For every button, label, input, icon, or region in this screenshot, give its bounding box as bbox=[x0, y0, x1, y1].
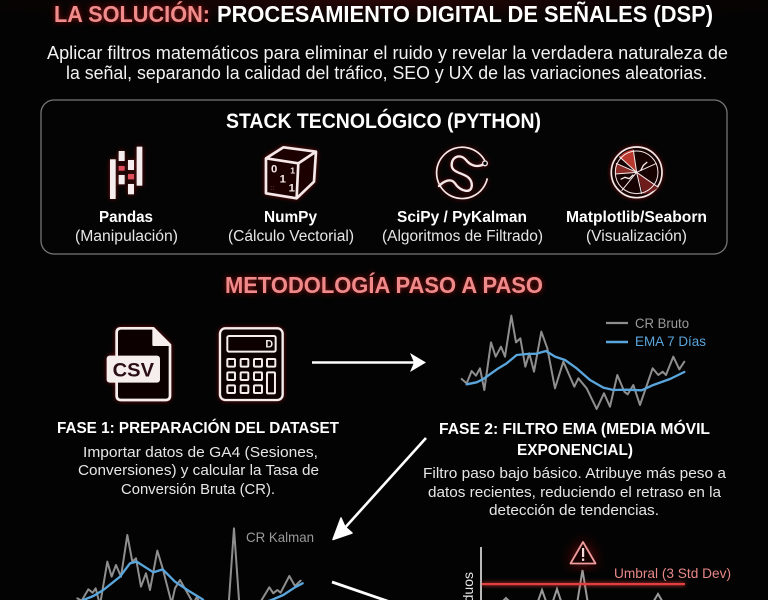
arrow: fase 1 to fase 2 bbox=[312, 353, 426, 372]
icon: calculator: D bbox=[265, 339, 273, 351]
icon: numpy cube: 0 bbox=[271, 164, 277, 176]
panel heading: STACK TECNOLÓGICO (PYTHON) bbox=[226, 109, 541, 133]
legend: EMA 7 Días bbox=[606, 333, 706, 349]
legend: CR Kalman: CR Kalman bbox=[246, 529, 314, 545]
title: LA SOLUCIÓN: bbox=[54, 0, 210, 27]
intro text: la señal, separando la calidad del tráfico, SEO y UX de las variaciones aleatorias. bbox=[66, 63, 707, 83]
icon: numpy cube: 1 bbox=[289, 183, 295, 195]
text: fase 2: FASE 2: FILTRO EMA (MEDIA MÓVIL bbox=[439, 419, 710, 438]
text: fase 1 bbox=[57, 418, 339, 498]
label: matplotlib bbox=[566, 209, 707, 245]
legend: EMA 7 Días: EMA 7 Días bbox=[635, 333, 706, 349]
text: fase 1: Conversiones) y calcular la Tasa de bbox=[78, 463, 319, 479]
icon: numpy cube: 1 bbox=[290, 165, 295, 175]
icon: numpy cube: :: bbox=[271, 184, 274, 191]
arrow: fase 3 to fase 4 bbox=[332, 582, 396, 600]
chart: kalman filter bbox=[77, 528, 314, 600]
intro text: Aplicar filtros matemáticos para eliminar el ruido y revelar la verdadera naturaleza de bbox=[47, 43, 728, 63]
text: fase 2 bbox=[423, 419, 727, 519]
label: pandas: (Manipulación) bbox=[75, 228, 178, 245]
label: numpy: NumPy bbox=[264, 209, 317, 226]
text: fase 2: Filtro paso bajo básico. Atribuye más peso a bbox=[423, 466, 727, 482]
threshold label: Umbral (3 Std Dev) bbox=[614, 565, 731, 581]
label: matplotlib: Matplotlib/Seaborn bbox=[566, 209, 707, 226]
title bbox=[54, 0, 713, 27]
label: numpy: (Cálculo Vectorial) bbox=[228, 228, 354, 245]
label: matplotlib: (Visualización) bbox=[586, 228, 687, 245]
icon: calculator bbox=[220, 328, 283, 400]
label: pandas bbox=[75, 209, 178, 245]
text: fase 2: datos recientes, reduciendo el retraso en la bbox=[428, 485, 722, 501]
icon: warning bbox=[570, 542, 596, 564]
label: pandas: Pandas bbox=[99, 209, 153, 226]
icon: scipy bbox=[437, 147, 487, 199]
chart: EMA filter bbox=[462, 315, 706, 409]
legend: CR Bruto: CR Bruto bbox=[635, 315, 689, 331]
text: fase 1: Importar datos de GA4 (Sesiones, bbox=[83, 445, 318, 461]
label: scipy: (Algoritmos de Filtrado) bbox=[382, 228, 543, 245]
panel: stack tecnológico bbox=[41, 100, 727, 254]
residual spikes bbox=[500, 570, 664, 600]
title: PROCESAMIENTO DIGITAL DE SEÑALES (DSP) bbox=[217, 0, 713, 27]
icon: csv file bbox=[107, 328, 170, 400]
icon: matplotlib bbox=[611, 147, 662, 198]
text: fase 2: detección de tendencias. bbox=[489, 503, 659, 519]
threshold line bbox=[482, 583, 685, 585]
icon: csv file: CSV bbox=[113, 360, 154, 381]
label: scipy: SciPy / PyKalman bbox=[397, 209, 527, 226]
section heading: metodología: METODOLOGÍA PASO A PASO bbox=[225, 271, 543, 298]
label: numpy bbox=[228, 209, 354, 245]
text: fase 1: FASE 1: PREPARACIÓN DEL DATASET bbox=[57, 418, 339, 437]
chart: residuals with threshold bbox=[460, 542, 731, 600]
icon: pandas bbox=[110, 147, 142, 199]
axis bbox=[480, 547, 482, 600]
text: fase 2: EXPONENCIAL) bbox=[517, 442, 633, 459]
icon: numpy cube bbox=[266, 147, 316, 198]
intro text bbox=[47, 43, 728, 83]
legend: CR Bruto bbox=[606, 315, 689, 331]
text: fase 1: Conversión Bruta (CR). bbox=[121, 482, 275, 498]
label: scipy bbox=[382, 209, 543, 245]
arrow: fase 2 to fase 3 bbox=[333, 438, 426, 540]
icon: numpy cube: 1 bbox=[280, 174, 286, 186]
